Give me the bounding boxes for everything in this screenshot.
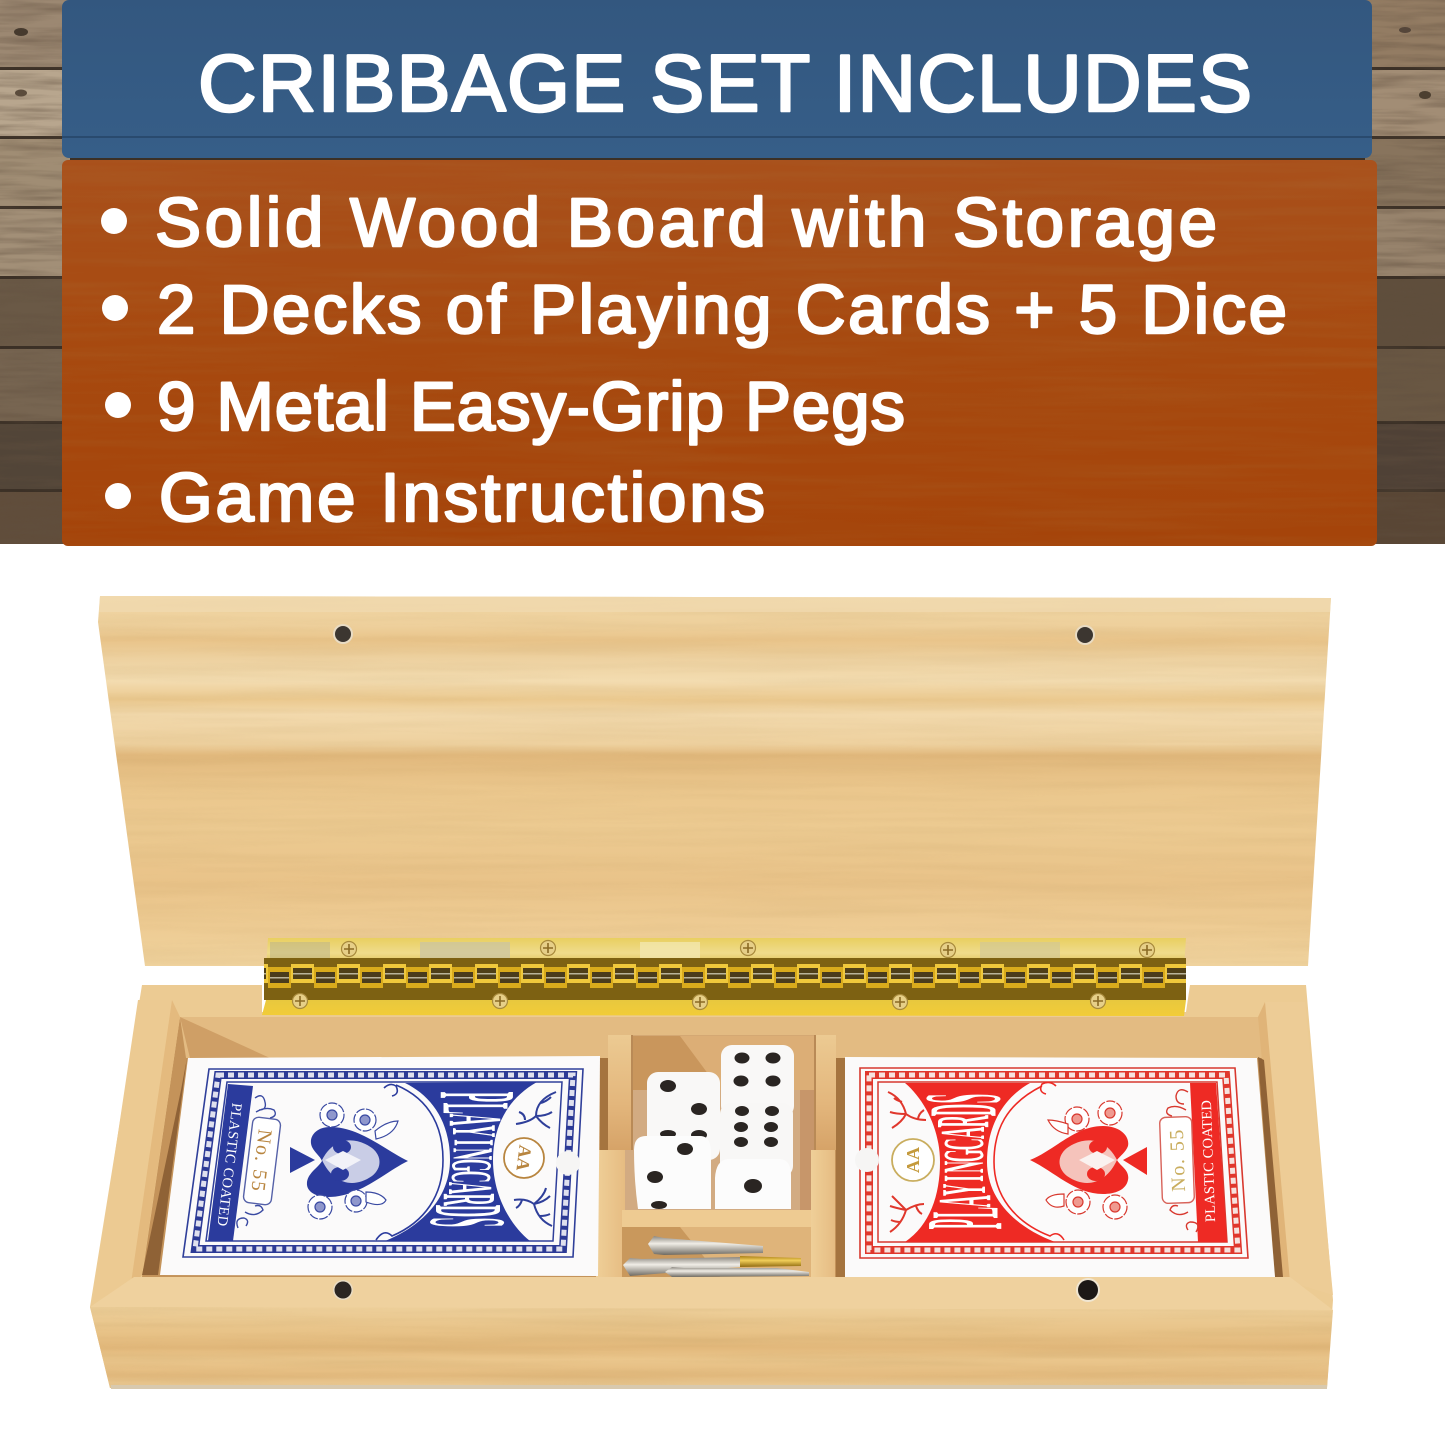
card border: [860, 1068, 1248, 1258]
die back left: [647, 1072, 720, 1160]
peg two: [623, 1256, 801, 1276]
twig ornaments: [514, 1092, 556, 1226]
twig ornaments: [888, 1092, 926, 1232]
hinge screws: [292, 940, 1154, 1010]
playing cards banner: N: [933, 1161, 997, 1173]
AA logo: AA: [512, 1144, 536, 1172]
die front right: [715, 1159, 791, 1209]
title: CRIBBAGE SET INCLUDES: [198, 39, 1252, 129]
playing cards banner: A: [922, 1195, 1007, 1207]
playing cards banner: D: [414, 1205, 522, 1217]
playing cards banner: A: [928, 1127, 999, 1139]
number box: [1160, 1116, 1194, 1204]
box base: [90, 985, 1333, 1389]
playing cards banner: Y: [929, 1184, 1000, 1196]
peg three: [665, 1267, 809, 1277]
playing cards banner: R: [920, 1115, 1005, 1128]
flowers: [1046, 1101, 1127, 1219]
card box: [845, 1057, 1275, 1277]
playing cards banner: C: [933, 1138, 997, 1150]
playing cards banner: R: [428, 1193, 512, 1206]
corner curls: [1167, 1090, 1198, 1232]
peg tray: [622, 1210, 811, 1227]
wooden cribbage box: [90, 596, 1333, 1389]
list item: solid wood board: Solid Wood Board with Storage: [155, 184, 1217, 261]
panel: title banner: [62, 0, 1372, 158]
playing cards banner: C: [438, 1171, 502, 1183]
playing cards banner: D: [909, 1104, 1018, 1116]
front wall face: [90, 1307, 1333, 1388]
list item: instructions: Game Instructions: [159, 459, 765, 536]
playing cards banner: S: [903, 1094, 1024, 1103]
base peg hole left: [333, 1280, 353, 1300]
die back right: [721, 1045, 794, 1117]
divider posts: [608, 1035, 631, 1150]
playing cards banner: S: [406, 1218, 528, 1227]
die middle right: [720, 1103, 793, 1177]
peg one: [648, 1236, 763, 1255]
number box: No. 55: [246, 1128, 276, 1194]
lid peg hole left: [333, 624, 353, 644]
dice: [634, 1045, 794, 1209]
AA logo: [892, 1139, 934, 1181]
playing cards banner: I: [933, 1175, 997, 1182]
spade emblem: [1030, 1126, 1147, 1194]
AA logo: AA: [903, 1147, 923, 1173]
centre compartment: [596, 1035, 846, 1277]
gold piano hinge: [262, 938, 1186, 1016]
side band: [208, 1084, 253, 1241]
thumb notch: [855, 1148, 879, 1172]
list item: metal pegs: 9 Metal Easy-Grip Pegs: [157, 368, 905, 445]
playing cards banner: Y: [438, 1125, 509, 1137]
plastic coated label: PLASTIC COATED: [213, 1102, 244, 1227]
panel: contents list: [62, 160, 1377, 546]
playing cards banner: A: [434, 1182, 505, 1194]
playing cards banner: L: [421, 1103, 530, 1114]
base peg hole right: [1076, 1278, 1100, 1302]
playing cards banner: G: [933, 1149, 997, 1162]
right wall: [1265, 1002, 1333, 1295]
side band: [1190, 1083, 1227, 1242]
corner curls: [237, 1096, 275, 1228]
card border: [183, 1069, 583, 1257]
spade emblem: [290, 1127, 408, 1197]
die front left: [634, 1136, 711, 1209]
playing cards banner: A: [433, 1114, 518, 1126]
playing cards banner: L: [911, 1207, 1020, 1218]
playing cards banner: [376, 1082, 537, 1241]
lid peg hole right: [1075, 625, 1095, 645]
left wall: [93, 1000, 172, 1300]
playing cards: red deck: [845, 1057, 1275, 1277]
list item: decks and dice: 2 Decks of Playing Cards + 5 Dice: [157, 271, 1287, 348]
card box: [160, 1056, 600, 1276]
playing cards banner: P: [905, 1219, 1026, 1229]
thumb notch: [556, 1151, 580, 1175]
playing cards: blue deck: [160, 1056, 600, 1276]
box lid: [98, 596, 1331, 966]
AA logo: [504, 1138, 544, 1178]
background: wooden planks header: [0, 0, 1445, 544]
flowers: [308, 1103, 398, 1219]
playing cards banner: P: [415, 1092, 537, 1102]
plastic coated label: PLASTIC COATED: [1199, 1100, 1219, 1222]
playing cards banner: [903, 1082, 1064, 1242]
number box: No. 55: [1166, 1128, 1190, 1192]
metal pegs: [623, 1236, 809, 1277]
number box: [243, 1117, 281, 1205]
playing cards banner: G: [439, 1159, 503, 1172]
front wall top: [90, 1277, 1333, 1310]
playing cards banner: N: [440, 1148, 504, 1160]
playing cards banner: I: [441, 1139, 504, 1146]
